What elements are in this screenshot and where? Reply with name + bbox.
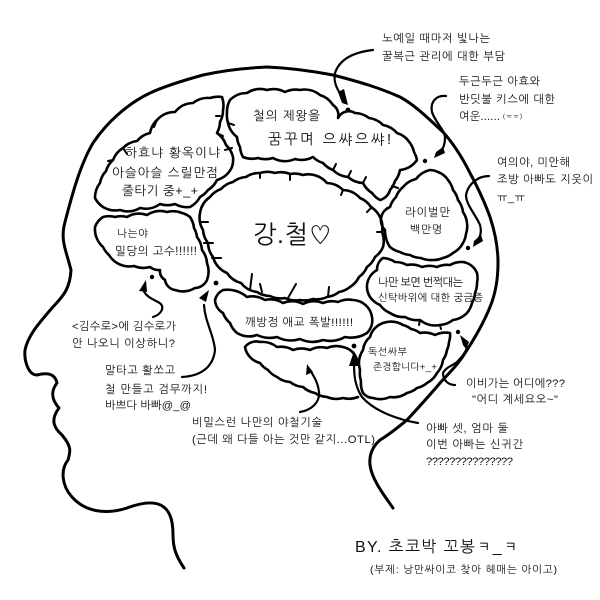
callout: 여의야, 미안해: [497, 156, 593, 204]
panel: left lobe, 나는야 밀당의 고수: [95, 211, 209, 291]
panel: center lobe, 강철: [200, 172, 384, 300]
credit: BY. 초코박 꼬봉: (부제: 낭만싸이코 찾아 헤매는 아이고): [370, 564, 557, 576]
callout: 아빠 셋, 엄마 둘: [426, 422, 523, 468]
panel: top lobe, 철의 제왕을: [227, 89, 417, 200]
callout: 두근두근 아효와: 여운......: [459, 110, 500, 123]
callout: 두근두근 아효와: 반딧불 키스에 대한: [459, 93, 555, 106]
arrow: 이비가 callout: [443, 330, 469, 385]
callout: 김수로: [72, 320, 176, 350]
text: 철의 제왕을: 철의 제왕을: [253, 109, 320, 123]
callout: 비밀스런 야철기술: [192, 416, 375, 446]
callout: 비밀스런 야철기술: (근데 왜 다들 아는 것만 같지...OTL): [192, 433, 375, 446]
text: 깨방정 애교 폭발: 깨방정 애교 폭발!!!!!!: [245, 316, 353, 329]
text: 아슬아슬 스릴만점: 아슬아슬 스릴만점: [112, 166, 218, 180]
callout: 이비가는 어디에: 이비가는 어디에???: [466, 377, 565, 390]
arrow: 두근두근 callout: [423, 96, 446, 163]
callout: 두근두근 아효와: (ㅠㅠ): [503, 114, 522, 120]
callout: 아빠 셋, 엄마 둘: 이번 아빠는 신귀간: [426, 438, 523, 451]
arrow: 김수로 callout: [139, 275, 162, 317]
text: 존경합니다+_+: 존경합니다+_+: [373, 362, 437, 373]
callout: 이비가는 어디에: [466, 377, 565, 406]
text: 나만 보면 번쩍대는: 나만 보면 번쩍대는: [378, 276, 463, 289]
callout: 여의야, 미안해: ㅠ_ㅠ: [497, 192, 525, 204]
panel: bottom lobe, 야철기술: [245, 341, 358, 399]
arrow: 비밀 callout: [300, 364, 319, 412]
callout: 여의야, 미안해: 여의야, 미안해: [497, 156, 570, 169]
text: 꿈꾸며 으쌰으쌰!: 꿈꾸며 으쌰으쌰!: [268, 132, 391, 148]
callout: 말타고 활쏘고: 말타고 활쏘고: [105, 364, 175, 377]
text: 줄타기 중+_+: 줄타기 중+_+: [122, 184, 198, 198]
callout: 노예일 때마저 빛나는: 꿀복근 관리에 대한 부담: [382, 50, 505, 63]
callout: 이비가는 어디에: "어디 계세요오~": [472, 393, 558, 406]
panel: lower right lobe, 나만 보면 번쩍대는: [367, 258, 483, 329]
text: 독선싸부: 독선싸부: [368, 346, 407, 358]
callout: 노예일 때마저 빛나는: [382, 32, 505, 63]
text: 강.철 heart: 강.철♡: [253, 221, 332, 249]
callout: 비밀스런 야철기술: 비밀스런 나만의 야철기술: [192, 416, 322, 429]
panel: right lobe, 라이벌만 백만명: [381, 170, 467, 260]
text: 백만명: 백만명: [410, 223, 442, 236]
callout: 말타고 활쏘고: 철 만들고 검무까지!: [105, 383, 207, 396]
callout: 김수로: 안 나오니 이상하니?: [72, 337, 175, 350]
arrow: 아빠 셋 callout: [349, 344, 418, 423]
callout: 김수로: <김수로>에 김수로가: [72, 320, 176, 333]
panel: lower center lobe, 깨방정 애교 폭발: [215, 290, 372, 342]
callout: 아빠 셋, 엄마 둘: 아빠 셋, 엄마 둘: [426, 422, 508, 435]
text: 나는야: 나는야: [117, 228, 148, 240]
credit: BY. 초코박 꼬봉: BY. 초코박 꼬봉ㅋ_ㅋ: [355, 538, 518, 556]
callout: 아빠 셋, 엄마 둘: ???????????????: [426, 456, 513, 468]
text: 신탁바위에 대한 궁금증: 신탁바위에 대한 궁금증: [378, 292, 483, 304]
panel: frontal lobe, 하효냐 황옥이냐: [95, 97, 233, 211]
callout: 두근두근 아효와: [459, 75, 555, 123]
panel: bottom right lobe, 독선싸부 존경합니다: [359, 322, 450, 399]
text: 라이벌만: 라이벌만: [405, 206, 450, 219]
callout: 말타고 활쏘고: 바쁘다 바빠@_@: [105, 399, 191, 412]
credit: BY. 초코박 꼬봉: [355, 538, 557, 576]
arrow: 여의야 callout: [466, 176, 489, 250]
callout: 두근두근 아효와: 두근두근 아효와: [459, 75, 540, 88]
text: 하효냐 황옥이냐: 하효냐 황옥이냐: [125, 146, 220, 160]
callout: 노예일 때마저 빛나는: 노예일 때마저 빛나는: [382, 32, 490, 45]
callout: 여의야, 미안해: 조방 아빠도 지웃이: [497, 173, 593, 186]
arrow: 말타고 callout: [182, 281, 218, 377]
head outline: [25, 67, 498, 568]
text: 밀당의 고수!!!!!!: 밀당의 고수!!!!!!: [115, 245, 197, 258]
arrow: 노예일 callout to top lobe: [335, 50, 373, 112]
callout: 말타고 활쏘고: [105, 364, 207, 412]
